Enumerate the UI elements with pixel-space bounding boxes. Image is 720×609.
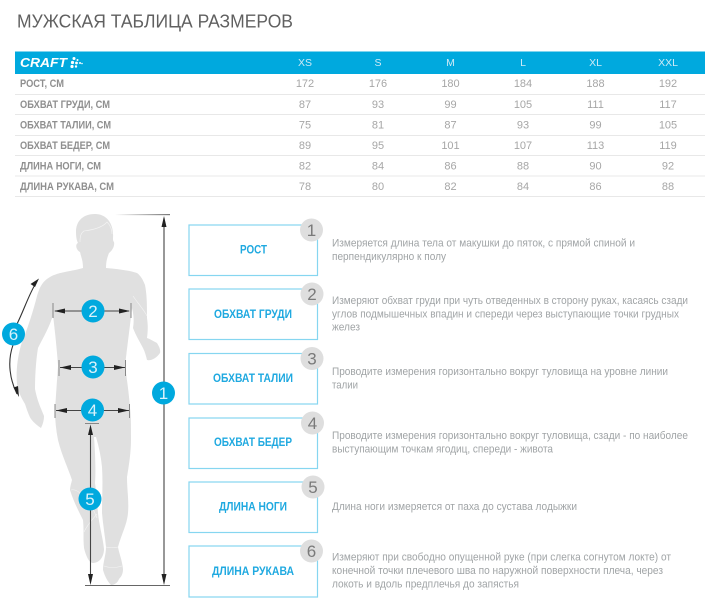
measure 5: leg length arrow: 5 (85, 490, 95, 509)
table header bar: L (520, 57, 526, 69)
row: hips: 113 (587, 140, 604, 152)
row: hips: 95 (372, 140, 384, 152)
row: leg length: ДЛИНА НОГИ, СМ (20, 160, 101, 172)
panel: sleeve length (189, 540, 671, 597)
panel: hips: ОБХВАТ БЕДЕР (214, 435, 292, 449)
row: hips: 89 (299, 140, 311, 152)
panel: hips: Проводите измерения горизонтально вокруг туловища, сзади - по наиболее (332, 430, 688, 442)
table header bar: XS (298, 57, 312, 69)
size table (15, 52, 705, 196)
table header bar: S (374, 57, 382, 69)
panel: height: РОСТ (240, 242, 268, 256)
panel: leg length (189, 476, 577, 532)
table header bar (15, 52, 705, 74)
panel: height: перпендикулярно к полу (332, 251, 446, 263)
measure 6: sleeve arrow (2, 278, 39, 397)
row: hips: 119 (659, 140, 677, 152)
panel: waist: ОБХВАТ ТАЛИИ (213, 371, 293, 385)
row: chest: ОБХВАТ ГРУДИ, СМ (20, 99, 110, 111)
measure 1: height line (85, 214, 175, 586)
measure 6: sleeve arrow: 6 (9, 325, 18, 344)
panel: chest: желез (332, 322, 360, 334)
row: height: 180 (441, 78, 460, 90)
row: height (20, 78, 677, 90)
row: waist: 105 (659, 120, 677, 132)
row: leg length: 90 (589, 160, 602, 172)
badge 5 (302, 476, 324, 498)
measure 3: waist arrow: 3 (88, 358, 98, 377)
body figure with measurements (2, 214, 175, 586)
row: waist: ОБХВАТ ТАЛИИ, СМ (20, 120, 111, 132)
badge 2 (300, 282, 324, 306)
panel: leg length: ДЛИНА НОГИ (219, 500, 287, 514)
row: leg length: 82 (299, 160, 311, 172)
row: chest: 93 (372, 99, 384, 111)
badge 3: 3 (307, 350, 317, 368)
row: waist: 87 (444, 120, 457, 132)
panel: leg length: Длина ноги измеряется от паха до сустава лодыжки (332, 501, 577, 513)
panel: height (189, 218, 635, 276)
badge 2: 2 (307, 285, 317, 304)
panel: sleeve length: ДЛИНА РУКАВА (212, 564, 294, 578)
row: leg length: 86 (444, 160, 457, 172)
measure 4: hips arrow (55, 398, 130, 422)
row: leg length: 84 (372, 160, 384, 172)
badge 1: 1 (307, 221, 316, 240)
icon: body silhouette (17, 214, 160, 585)
panel: height: Измеряется длина тела от макушки до пяток, с прямой спиной и (332, 238, 635, 250)
row: chest: 111 (587, 99, 604, 111)
row: sleeve length: 82 (444, 181, 457, 193)
row: height: РОСТ, СМ (20, 78, 64, 90)
row: chest: 87 (299, 99, 311, 111)
row: chest: 99 (444, 99, 457, 111)
row: waist: 93 (517, 120, 529, 132)
panel: chest: Измеряют обхват груди при чуть отведенных в сторону руках, касаясь сзади (332, 295, 688, 307)
row: sleeve length: 78 (299, 181, 311, 193)
row: sleeve length: 88 (662, 181, 674, 193)
badge 4 (301, 412, 324, 434)
measure 3: waist arrow (59, 356, 126, 378)
panel: waist: Проводите измерения горизонтально вокруг туловища на уровне линии (332, 366, 668, 378)
measure 2: chest arrow: 2 (88, 302, 98, 321)
row: waist: 99 (589, 120, 602, 132)
panel: sleeve length: конечной точки плечевого шва по наружной поверхности плеча, через (332, 565, 663, 577)
table header bar: M (446, 57, 455, 69)
badge 6: 6 (307, 542, 316, 561)
row: height: 184 (514, 78, 532, 90)
badge 1 (300, 218, 323, 242)
table header bar: XL (589, 57, 602, 69)
row: sleeve length: ДЛИНА РУКАВА, СМ (20, 181, 114, 193)
row: height: 192 (659, 78, 677, 90)
row: leg length (20, 160, 674, 172)
panel: chest: углов подмышечных впадин и спереди через выступающие точки грудных (332, 308, 679, 320)
row: waist: 81 (372, 120, 384, 132)
row: sleeve length: 84 (517, 181, 529, 193)
row: hips: 107 (514, 140, 532, 152)
row: height: 172 (296, 78, 314, 90)
row: waist: 75 (299, 120, 311, 132)
row: hips: 101 (441, 140, 460, 152)
badge 4: 4 (308, 414, 317, 433)
panel: chest: ОБХВАТ ГРУДИ (214, 307, 292, 321)
row: leg length: 92 (662, 160, 674, 172)
row: height: 188 (586, 78, 605, 90)
badge 3 (300, 347, 324, 370)
measure 2: chest arrow (53, 300, 131, 322)
panel: chest (189, 282, 688, 340)
badge 5: 5 (308, 478, 318, 497)
measure 1: height line: 1 (159, 384, 168, 403)
row: height: 176 (369, 78, 387, 90)
row: hips: ОБХВАТ БЕДЕР, СМ (20, 140, 110, 152)
panel: hips (189, 412, 688, 468)
badge 6 (300, 540, 323, 562)
measure 5: leg length arrow (78, 424, 102, 585)
panel: waist: талии (332, 380, 358, 392)
row: chest (20, 99, 677, 111)
row: chest: 105 (514, 99, 532, 111)
panel: waist (189, 347, 668, 404)
row: leg length: 88 (517, 160, 529, 172)
row: waist (20, 120, 677, 132)
measure 4: hips arrow: 4 (88, 401, 97, 420)
row: sleeve length: 80 (372, 181, 384, 193)
row: chest: 117 (659, 99, 677, 111)
panel: hips: выступающим точкам ягодиц, спереди - живота (332, 444, 554, 456)
row: sleeve length: 86 (589, 181, 602, 193)
panel: sleeve length: локоть и вдоль предплечья до запястья (332, 578, 519, 590)
row: sleeve length (20, 181, 674, 193)
title: МУЖСКАЯ ТАБЛИЦА РАЗМЕРОВ (17, 12, 293, 32)
row: hips (20, 140, 677, 152)
panel: sleeve length: Измеряют при свободно опущенной руке (при слегка согнутом локте) от (332, 552, 671, 564)
logo: CRAFT: CRAFT (20, 55, 68, 70)
table header bar: XXL (658, 57, 678, 69)
